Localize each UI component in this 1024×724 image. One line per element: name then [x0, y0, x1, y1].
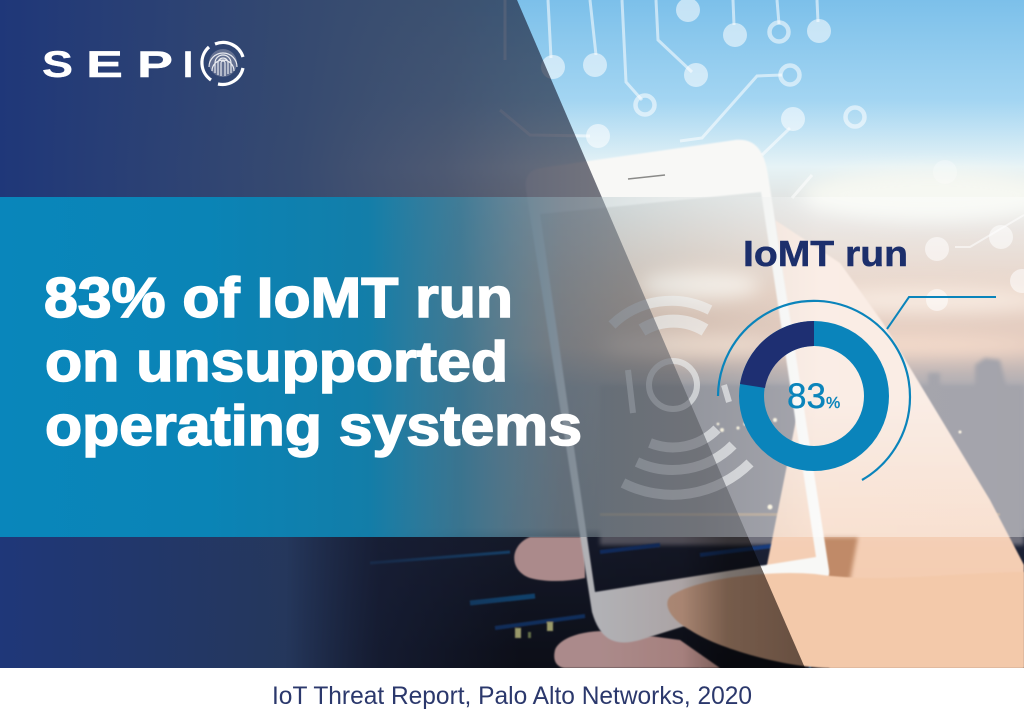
donut chart 83% [718, 297, 996, 480]
wifi arcs [612, 301, 750, 495]
thumb [667, 572, 1024, 668]
city lights and blue streaks in the lower dark area [370, 545, 820, 668]
main heading [44, 266, 582, 458]
phone body with screen cut-out [526, 140, 829, 643]
left fingers [514, 537, 720, 668]
blue horizontal band [0, 197, 1024, 537]
logo wordmark: I [183, 44, 193, 85]
logo wordmark [42, 44, 193, 85]
logo wordmark: E [86, 44, 123, 85]
donut value: 83% [787, 377, 840, 416]
footer source [0, 668, 1024, 724]
main heading: 83% of IoMT run [44, 266, 513, 330]
dark diagonal overlay: upper part [0, 0, 748, 537]
chart title: IoMT run [743, 233, 908, 274]
dark diagonal overlay: lower part [0, 537, 805, 668]
phone speaker [628, 175, 665, 179]
logo wordmark: P [137, 44, 173, 85]
logo fingerprint icon [202, 42, 243, 84]
circuit lines and nodes [500, 0, 1024, 311]
main heading: on unsupported [45, 330, 508, 394]
logo [42, 42, 243, 85]
logo wordmark: S [42, 44, 73, 85]
footer source: IoT Threat Report, Palo Alto Networks, 2020 [272, 682, 752, 710]
hand palm [760, 220, 1024, 668]
main heading: operating systems [45, 394, 582, 458]
